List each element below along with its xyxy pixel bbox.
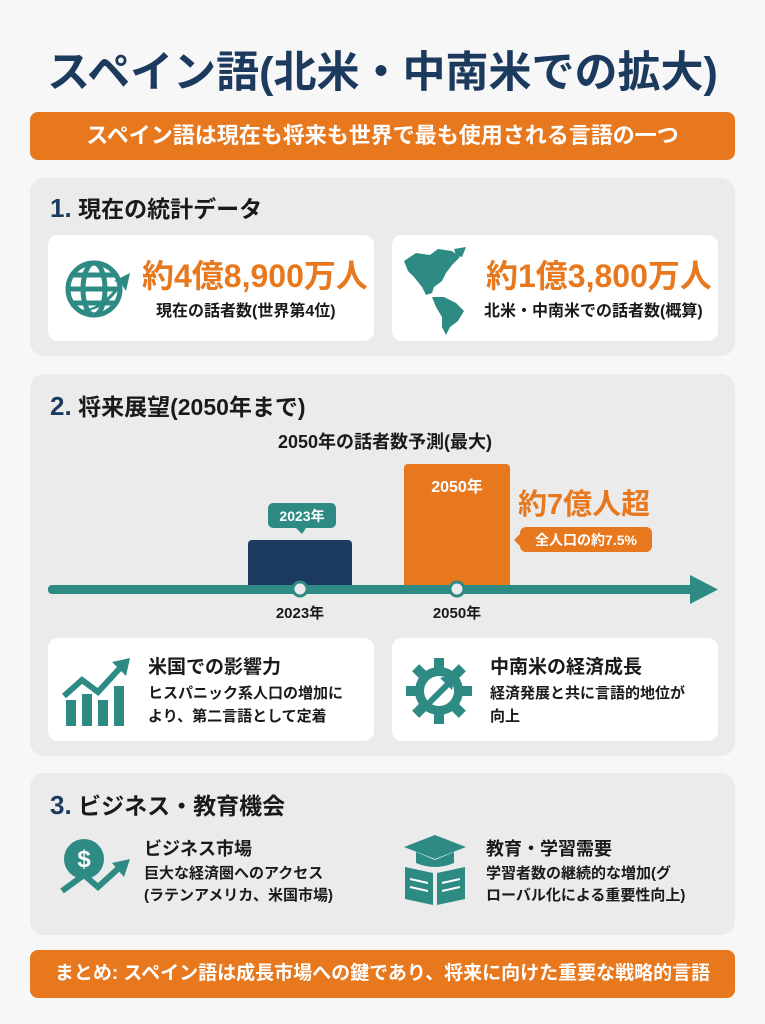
icon: graduation book bbox=[404, 835, 466, 905]
title: スペイン語(北米・中南米での拡大) bbox=[47, 49, 718, 97]
axis labels: 2050年 bbox=[433, 604, 481, 622]
bar 2050: 2050年 bbox=[431, 477, 483, 496]
card: US influence: より、第二言語として定着 bbox=[148, 708, 327, 725]
bar 2023 bbox=[248, 540, 352, 590]
card: Latin America growth bbox=[392, 638, 718, 741]
chart title: 2050年の話者数予測(最大) bbox=[278, 432, 492, 452]
card: US influence bbox=[48, 638, 374, 741]
icon: americas map bbox=[404, 247, 466, 335]
panel: business & education bbox=[30, 773, 735, 935]
banner: summary bbox=[30, 950, 735, 998]
item: business bbox=[60, 839, 333, 904]
heading 1: 1. 現在の統計データ bbox=[50, 193, 262, 223]
card text: 中南米の経済成長 bbox=[490, 657, 642, 678]
item: education: 学習者数の継続的な増加(グ bbox=[486, 865, 671, 882]
item: education bbox=[404, 835, 685, 905]
callout value: 約7億人超 bbox=[518, 488, 650, 521]
callout value: 全人口の約7.5% bbox=[535, 532, 638, 548]
icon: dollar growth: $ bbox=[77, 846, 91, 873]
bubble 2023: 2023年 bbox=[279, 508, 325, 524]
stat label: 現在の話者数(世界第4位) bbox=[156, 303, 336, 320]
axis labels bbox=[276, 604, 481, 622]
card text: 米国での影響力 bbox=[148, 657, 281, 678]
icon: gear arrow bbox=[406, 658, 472, 724]
item: business: 巨大な経済圏へのアクセス bbox=[144, 865, 323, 882]
stat label: 北米・中南米での話者数(概算) bbox=[484, 303, 703, 320]
bar 2050 bbox=[404, 464, 510, 590]
panel: current stats bbox=[30, 178, 735, 356]
heading 3: 3. ビジネス・教育機会 bbox=[50, 790, 285, 820]
timeline chart bbox=[48, 464, 718, 622]
arrow axis bbox=[48, 575, 718, 604]
bubble 2023 bbox=[268, 503, 336, 534]
item: education: ローバル化による重要性向上) bbox=[486, 887, 685, 904]
icon: growth chart bbox=[62, 658, 130, 726]
stat value: 約1億3,800万人 bbox=[486, 258, 712, 294]
axis labels: 2023年 bbox=[276, 604, 324, 622]
item text: ビジネス市場 bbox=[144, 839, 252, 859]
card: world speakers bbox=[48, 235, 374, 341]
stat value: 約4億8,900万人 bbox=[142, 258, 368, 294]
card: US influence: ヒスパニック系人口の増加に bbox=[148, 685, 343, 702]
card: Americas speakers bbox=[392, 235, 718, 341]
icon: dollar growth bbox=[60, 839, 130, 894]
card: Latin America growth: 向上 bbox=[490, 708, 520, 725]
heading 2: 2. 将来展望(2050年まで) bbox=[50, 391, 306, 421]
callout value bbox=[514, 488, 652, 552]
banner: summary: まとめ: スペイン語は成長市場への鍵であり、将来に向けた重要な戦略的言語 bbox=[55, 963, 710, 984]
item: business: (ラテンアメリカ、米国市場) bbox=[144, 887, 333, 904]
panel: future outlook bbox=[30, 374, 735, 756]
banner: top: スペイン語は現在も将来も世界で最も使用される言語の一つ bbox=[86, 123, 679, 148]
item text: 教育・学習需要 bbox=[486, 839, 612, 859]
icon: globe bbox=[65, 260, 130, 318]
banner: top bbox=[30, 112, 735, 160]
card: Latin America growth: 経済発展と共に言語的地位が bbox=[490, 685, 685, 702]
